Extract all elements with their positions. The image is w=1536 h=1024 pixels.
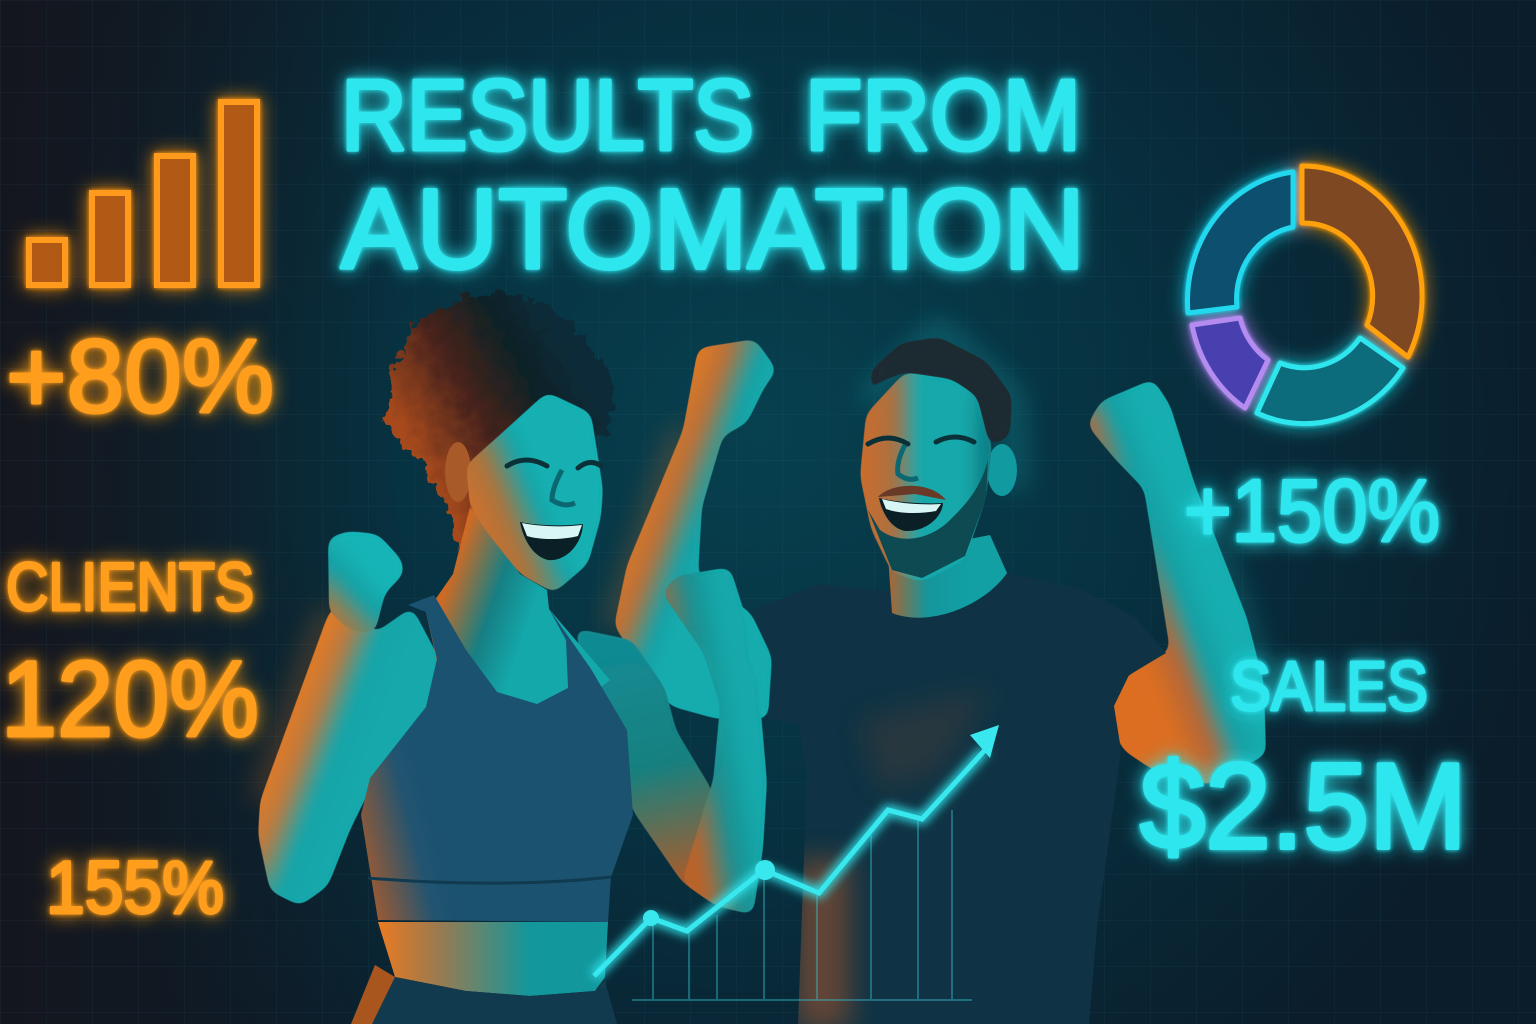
woman shorts side light: [351, 965, 395, 1024]
woman ear: [445, 442, 471, 502]
woman midriff: [378, 922, 608, 996]
title line 1: RESULTS: [341, 60, 754, 172]
stat: $2.5M: $2.5M: [1140, 738, 1467, 874]
woman head: [466, 392, 603, 593]
woman neck and chest: [426, 507, 610, 720]
stat: 155%: 155%: [46, 846, 224, 929]
woman eyes: [507, 460, 601, 468]
man figure: [614, 337, 1266, 1024]
man teeth: [882, 499, 941, 513]
title line 2: AUTOMATION: [341, 166, 1085, 292]
man eyes: [868, 437, 974, 444]
right statistics: [1140, 461, 1467, 874]
title: [341, 60, 1085, 292]
woman right upper arm: [574, 628, 720, 906]
chart bars and baseline: [632, 810, 972, 1000]
data points: [643, 860, 775, 926]
woman right forearm and fist: [662, 567, 767, 915]
stat: +80%: +80%: [6, 319, 274, 435]
trend line: [594, 750, 985, 976]
trend line glow: [594, 750, 985, 976]
woman hair: [385, 290, 612, 550]
donut chart icon: [1187, 166, 1422, 424]
woman mouth: [520, 522, 583, 560]
man neck: [888, 535, 1007, 618]
man t-shirt orange light: [795, 690, 990, 1024]
man moustache: [878, 486, 946, 500]
stat: clients label: CLIENTS: [6, 549, 254, 625]
stat: sales label: SALES: [1230, 647, 1428, 725]
figure glow halos: [262, 330, 1264, 800]
title line 1: [341, 60, 1081, 172]
left statistics: [1, 319, 274, 929]
woman teeth: [522, 523, 582, 539]
man nose: [898, 445, 918, 479]
title line 1: FROM: [805, 60, 1081, 172]
man beard: [868, 460, 988, 578]
stat: +150%: +150%: [1184, 461, 1440, 560]
woman left fist: [328, 531, 404, 633]
woman tank top: [361, 595, 633, 922]
man ear: [987, 444, 1017, 496]
bar chart icon: [29, 102, 257, 285]
man mouth: [879, 498, 943, 531]
man t-shirt: [751, 573, 1166, 1024]
woman top band line: [368, 877, 611, 883]
man hair: [866, 337, 1012, 447]
stat: 120%: 120%: [1, 638, 259, 759]
woman figure: [258, 290, 767, 1024]
man raised arm left: [614, 339, 777, 719]
man head: [860, 372, 992, 582]
arrow head: [970, 725, 999, 758]
man raised arm right: [1087, 379, 1266, 785]
growth line chart: [594, 725, 999, 1000]
woman nose: [552, 470, 575, 505]
woman left arm: [258, 600, 440, 906]
woman shorts: [351, 965, 617, 1024]
